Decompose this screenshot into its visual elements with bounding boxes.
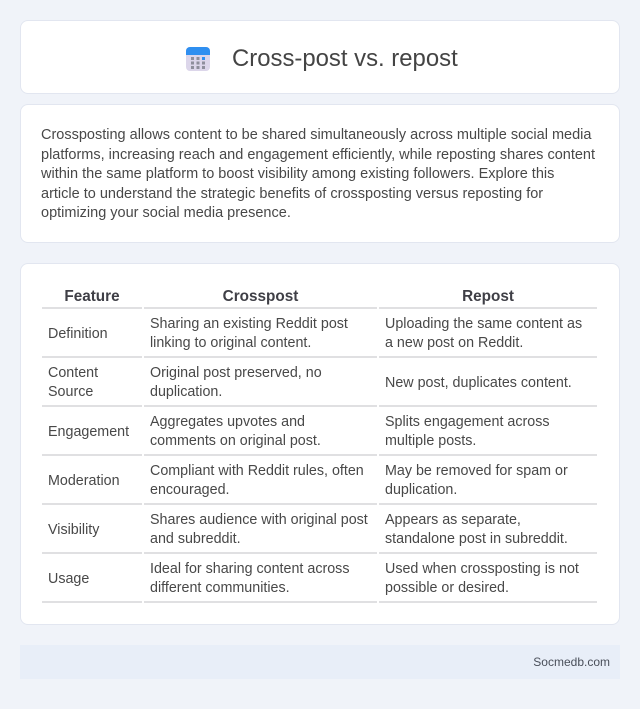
cell: Visibility crosspost xyxy=(150,512,368,546)
cell: Definition repost: Uploading the same content as xyxy=(385,316,582,332)
cell: Visibility repost: Appears as separate, xyxy=(385,512,521,528)
cell: Definition repost xyxy=(385,316,582,350)
cell: Definition repost: a new post on Reddit. xyxy=(385,334,523,350)
intro paragraph xyxy=(41,127,595,221)
column heading: Crosspost: Crosspost xyxy=(223,288,298,305)
cell: Usage crosspost: Ideal for sharing content across xyxy=(150,561,349,577)
cell: Content Source crosspost: duplication. xyxy=(150,384,222,400)
cell: Engagement repost: Splits engagement across xyxy=(385,414,550,430)
row: Usage: Usage xyxy=(48,571,89,587)
cell: Engagement crosspost: Aggregates upvotes and xyxy=(150,414,305,430)
icon: calendar xyxy=(186,47,210,71)
cell: Content Source crosspost xyxy=(150,365,322,400)
intro paragraph: within the same platform to boost visibility among existing followers. Explore this xyxy=(41,166,554,182)
cell: Usage repost: possible or desired. xyxy=(385,580,509,596)
cell: Visibility repost: standalone post in subreddit. xyxy=(385,530,568,546)
cell: Engagement repost: multiple posts. xyxy=(385,432,476,448)
intro paragraph: article to understand the strategic benefits of crossposting versus reposting for xyxy=(41,186,543,202)
row: Definition: Definition xyxy=(48,326,108,342)
cell: Usage repost xyxy=(385,561,579,596)
cell: Usage crosspost xyxy=(150,561,349,596)
cell: Visibility crosspost: Shares audience with original post xyxy=(150,512,368,528)
panel: intro text xyxy=(20,104,620,243)
row: Content Source: Content xyxy=(48,365,98,381)
cell: Moderation crosspost: encouraged. xyxy=(150,482,230,498)
cell: Usage crosspost: different communities. xyxy=(150,580,290,596)
cell: Moderation crosspost: Compliant with Reddit rules, often xyxy=(150,463,364,479)
cell: Definition crosspost xyxy=(150,316,348,350)
cell: Moderation repost: May be removed for spam or xyxy=(385,463,568,479)
cell: Visibility repost xyxy=(385,512,568,546)
cell: Engagement repost xyxy=(385,414,550,448)
cell: Moderation crosspost xyxy=(150,463,364,498)
row: Moderation: Moderation xyxy=(48,473,120,489)
table card background xyxy=(20,263,620,625)
row: Content Source: Source xyxy=(48,384,93,400)
cell: Visibility crosspost: and subreddit. xyxy=(150,530,241,546)
footer bar xyxy=(20,645,620,679)
panel: header xyxy=(20,20,620,94)
row: Visibility: Visibility xyxy=(48,522,99,538)
cell: Moderation repost xyxy=(385,463,568,498)
title: Cross-post vs. repost xyxy=(232,45,458,72)
intro paragraph: optimizing your social media presence. xyxy=(41,205,291,221)
cell: Definition crosspost: linking to original content. xyxy=(150,334,311,350)
footer source text: Socmedb.com xyxy=(533,655,610,669)
cell: Moderation repost: duplication. xyxy=(385,482,457,498)
intro paragraph: platforms, increasing reach and engagement efficiently, while reposting shares content xyxy=(41,146,595,162)
cell: Engagement crosspost: comments on original post. xyxy=(150,432,321,448)
cell: Engagement crosspost xyxy=(150,414,321,448)
row: Engagement: Engagement xyxy=(48,424,129,440)
cell: Content Source repost: New post, duplicates content. xyxy=(385,375,572,391)
intro paragraph: Crossposting allows content to be shared simultaneously across multiple social media xyxy=(41,127,591,143)
column heading: Feature: Feature xyxy=(64,288,120,305)
row: Content Source xyxy=(48,365,98,400)
cell: Definition crosspost: Sharing an existing Reddit post xyxy=(150,316,348,332)
cell: Content Source crosspost: Original post preserved, no xyxy=(150,365,322,381)
column heading: Repost: Repost xyxy=(462,288,514,305)
cell: Usage repost: Used when crossposting is not xyxy=(385,561,579,577)
